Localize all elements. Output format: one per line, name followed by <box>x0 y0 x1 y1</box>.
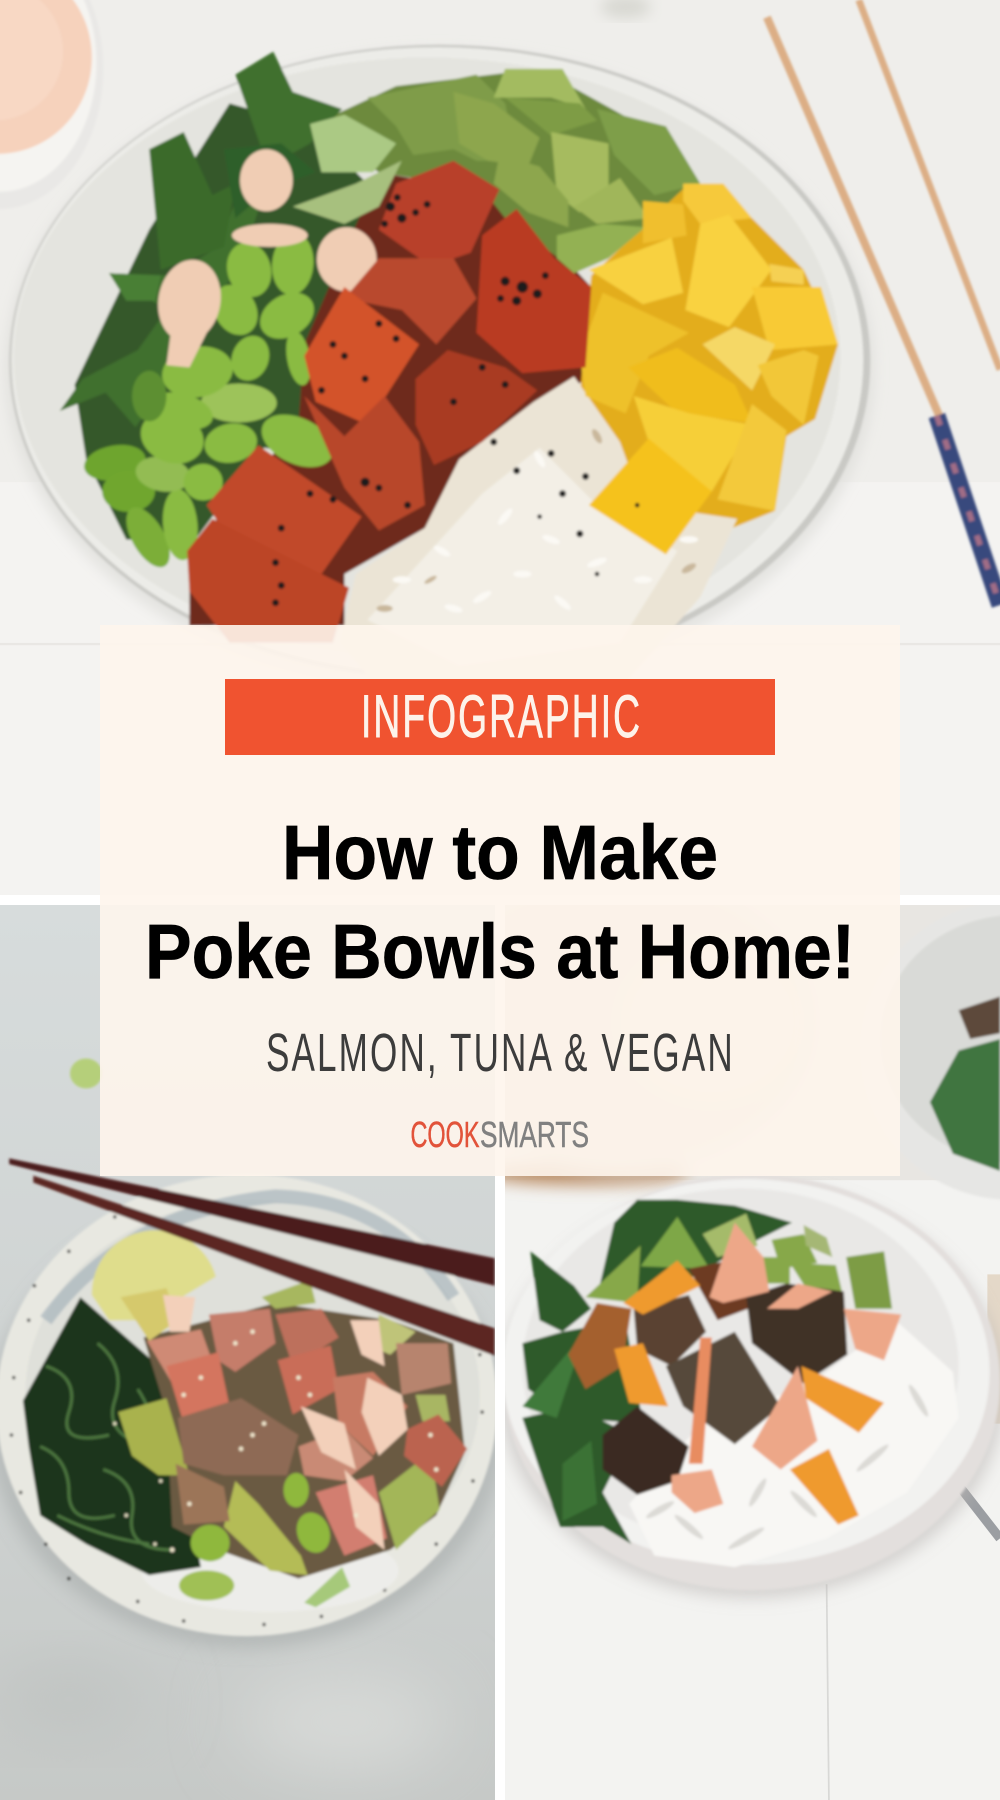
sesame seeds <box>272 194 639 606</box>
icon: side bowl with cucumber <box>861 901 1000 1200</box>
bowl and food <box>499 1174 1000 1598</box>
banner: infographic label <box>225 679 775 755</box>
rice <box>141 1529 398 1612</box>
bowl and food <box>6 45 874 689</box>
sauce <box>152 149 377 367</box>
sauce <box>163 1295 408 1550</box>
icon: sauce dish <box>0 0 103 209</box>
arugula <box>60 52 342 427</box>
kale <box>23 1297 201 1575</box>
icon: chopsticks <box>9 1158 495 1356</box>
edamame <box>81 231 341 574</box>
photo: tuna poke bowl <box>0 905 495 1800</box>
logo: Cook Smarts: SMARTS <box>480 1114 589 1155</box>
icon: blurred side dish <box>425 873 815 1185</box>
title: How to Make <box>282 810 718 896</box>
banner: infographic label: INFOGRAPHIC <box>361 683 640 750</box>
edamame <box>179 1473 350 1607</box>
lime <box>92 1230 216 1320</box>
food shadow underlays <box>75 69 838 626</box>
sauce <box>672 1223 901 1513</box>
greens <box>522 1200 792 1544</box>
orange segments <box>614 1261 884 1525</box>
avocado <box>293 69 700 273</box>
logo: Cook Smarts: COOK <box>410 1114 480 1155</box>
panel: title card <box>100 625 900 1176</box>
salmon <box>187 161 591 643</box>
bowl and food <box>0 1158 505 1647</box>
rice <box>629 1320 959 1567</box>
mango <box>580 184 838 554</box>
avocado <box>118 1280 450 1575</box>
food shadow underlay <box>143 1303 465 1579</box>
rice <box>340 377 737 689</box>
photo: vegan poke bowl <box>505 905 1000 1800</box>
avocado <box>585 1213 892 1309</box>
title <box>145 810 855 995</box>
tuna <box>147 1309 467 1556</box>
rim speckles <box>10 1215 484 1626</box>
sesame seeds <box>170 1329 439 1552</box>
logo: Cook Smarts <box>410 1114 589 1155</box>
photo: salmon poke bowl <box>0 0 1000 895</box>
tofu <box>568 1257 847 1495</box>
subtitle: SALMON, TUNA & VEGAN <box>266 1022 733 1083</box>
icon: chopsticks <box>767 0 1000 605</box>
